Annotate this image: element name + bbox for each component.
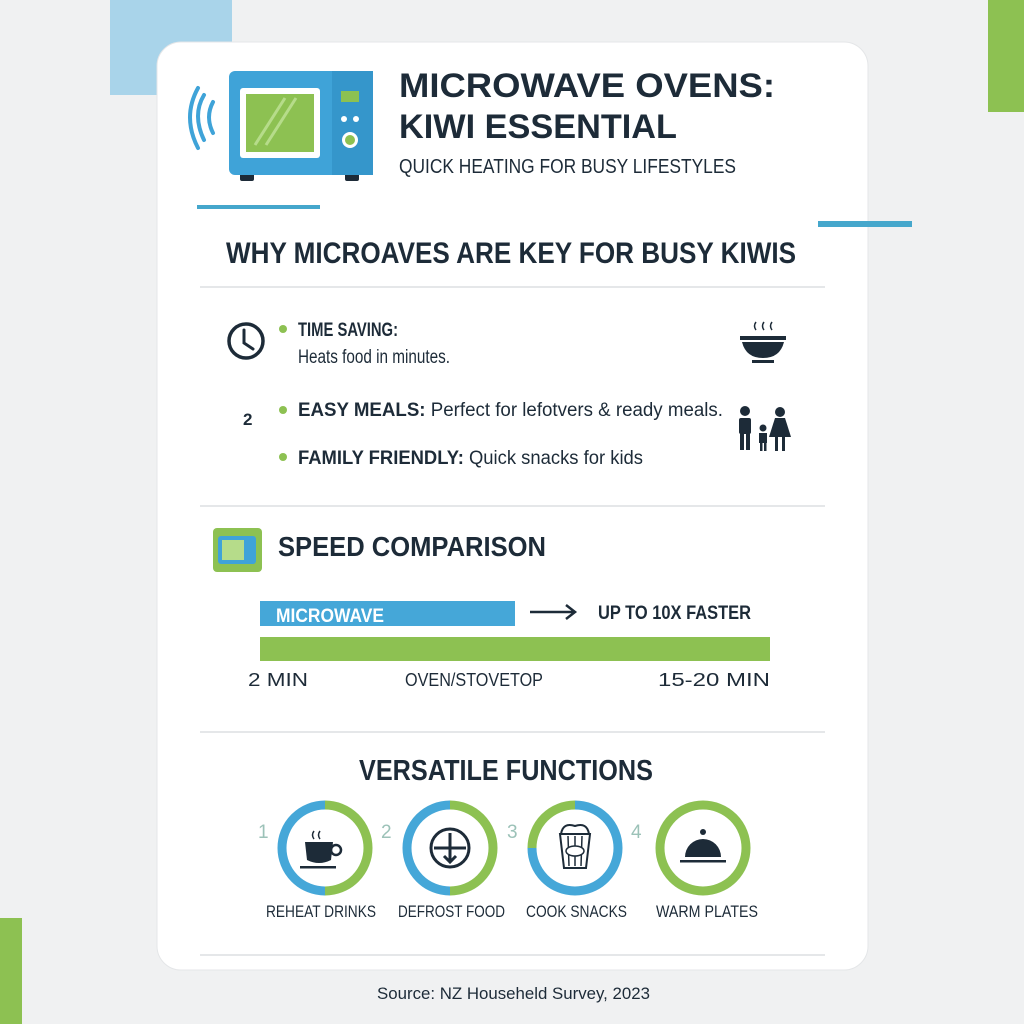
title [399,67,775,146]
heading: speed comparison: SPEED COMPARISON [278,531,546,562]
bar chart: OVEN/STOVETOP [405,670,543,690]
benefit list: TIME SAVING: [298,320,398,341]
icon: soup bowl [740,322,786,363]
title: KIWI ESSENTIAL [399,108,677,146]
function icons: 2 [381,822,392,843]
function icons: WARM PLATES [656,902,758,921]
heading: versatile functions: VERSATILE FUNCTIONS [359,755,653,787]
benefit list: FAMILY FRIENDLY: Quick snacks for kids [298,448,643,469]
bar chart: 15-20 MIN [658,670,770,690]
benefit list: 2 [243,410,252,429]
card [157,42,868,970]
icon: speed microwave [213,528,262,572]
benefit list: EASY MEALS: Perfect for lefotvers & ready meals. [298,400,723,421]
bar chart [248,601,770,690]
function icons: DEFROST FOOD [398,902,505,921]
bar chart: 2 MIN [248,670,308,690]
benefit list: Heats food in minutes. [298,347,450,368]
bar chart: UP TO 10X FASTER [598,603,751,624]
function icons: REHEAT DRINKS [266,902,376,921]
icon: clock [229,324,263,358]
subtitle: QUICK HEATING FOR BUSY LIFESTYLES [399,156,736,178]
icon: family [739,406,791,451]
heading: why: WHY MICROAVES ARE KEY FOR BUSY KIWIS [226,237,796,270]
function icons: 4 [631,822,642,843]
function icons: 1 [258,822,269,843]
function icons: COOK SNACKS [526,902,627,921]
title: MICROWAVE OVENS: [399,67,775,105]
function icons: 3 [507,822,518,843]
source: Source: NZ Househeld Survey, 2023 [377,984,650,1003]
benefit list [243,320,723,469]
function icons [258,805,758,921]
icon: microwave [190,71,373,181]
bar chart: MICROWAVE [276,606,384,627]
